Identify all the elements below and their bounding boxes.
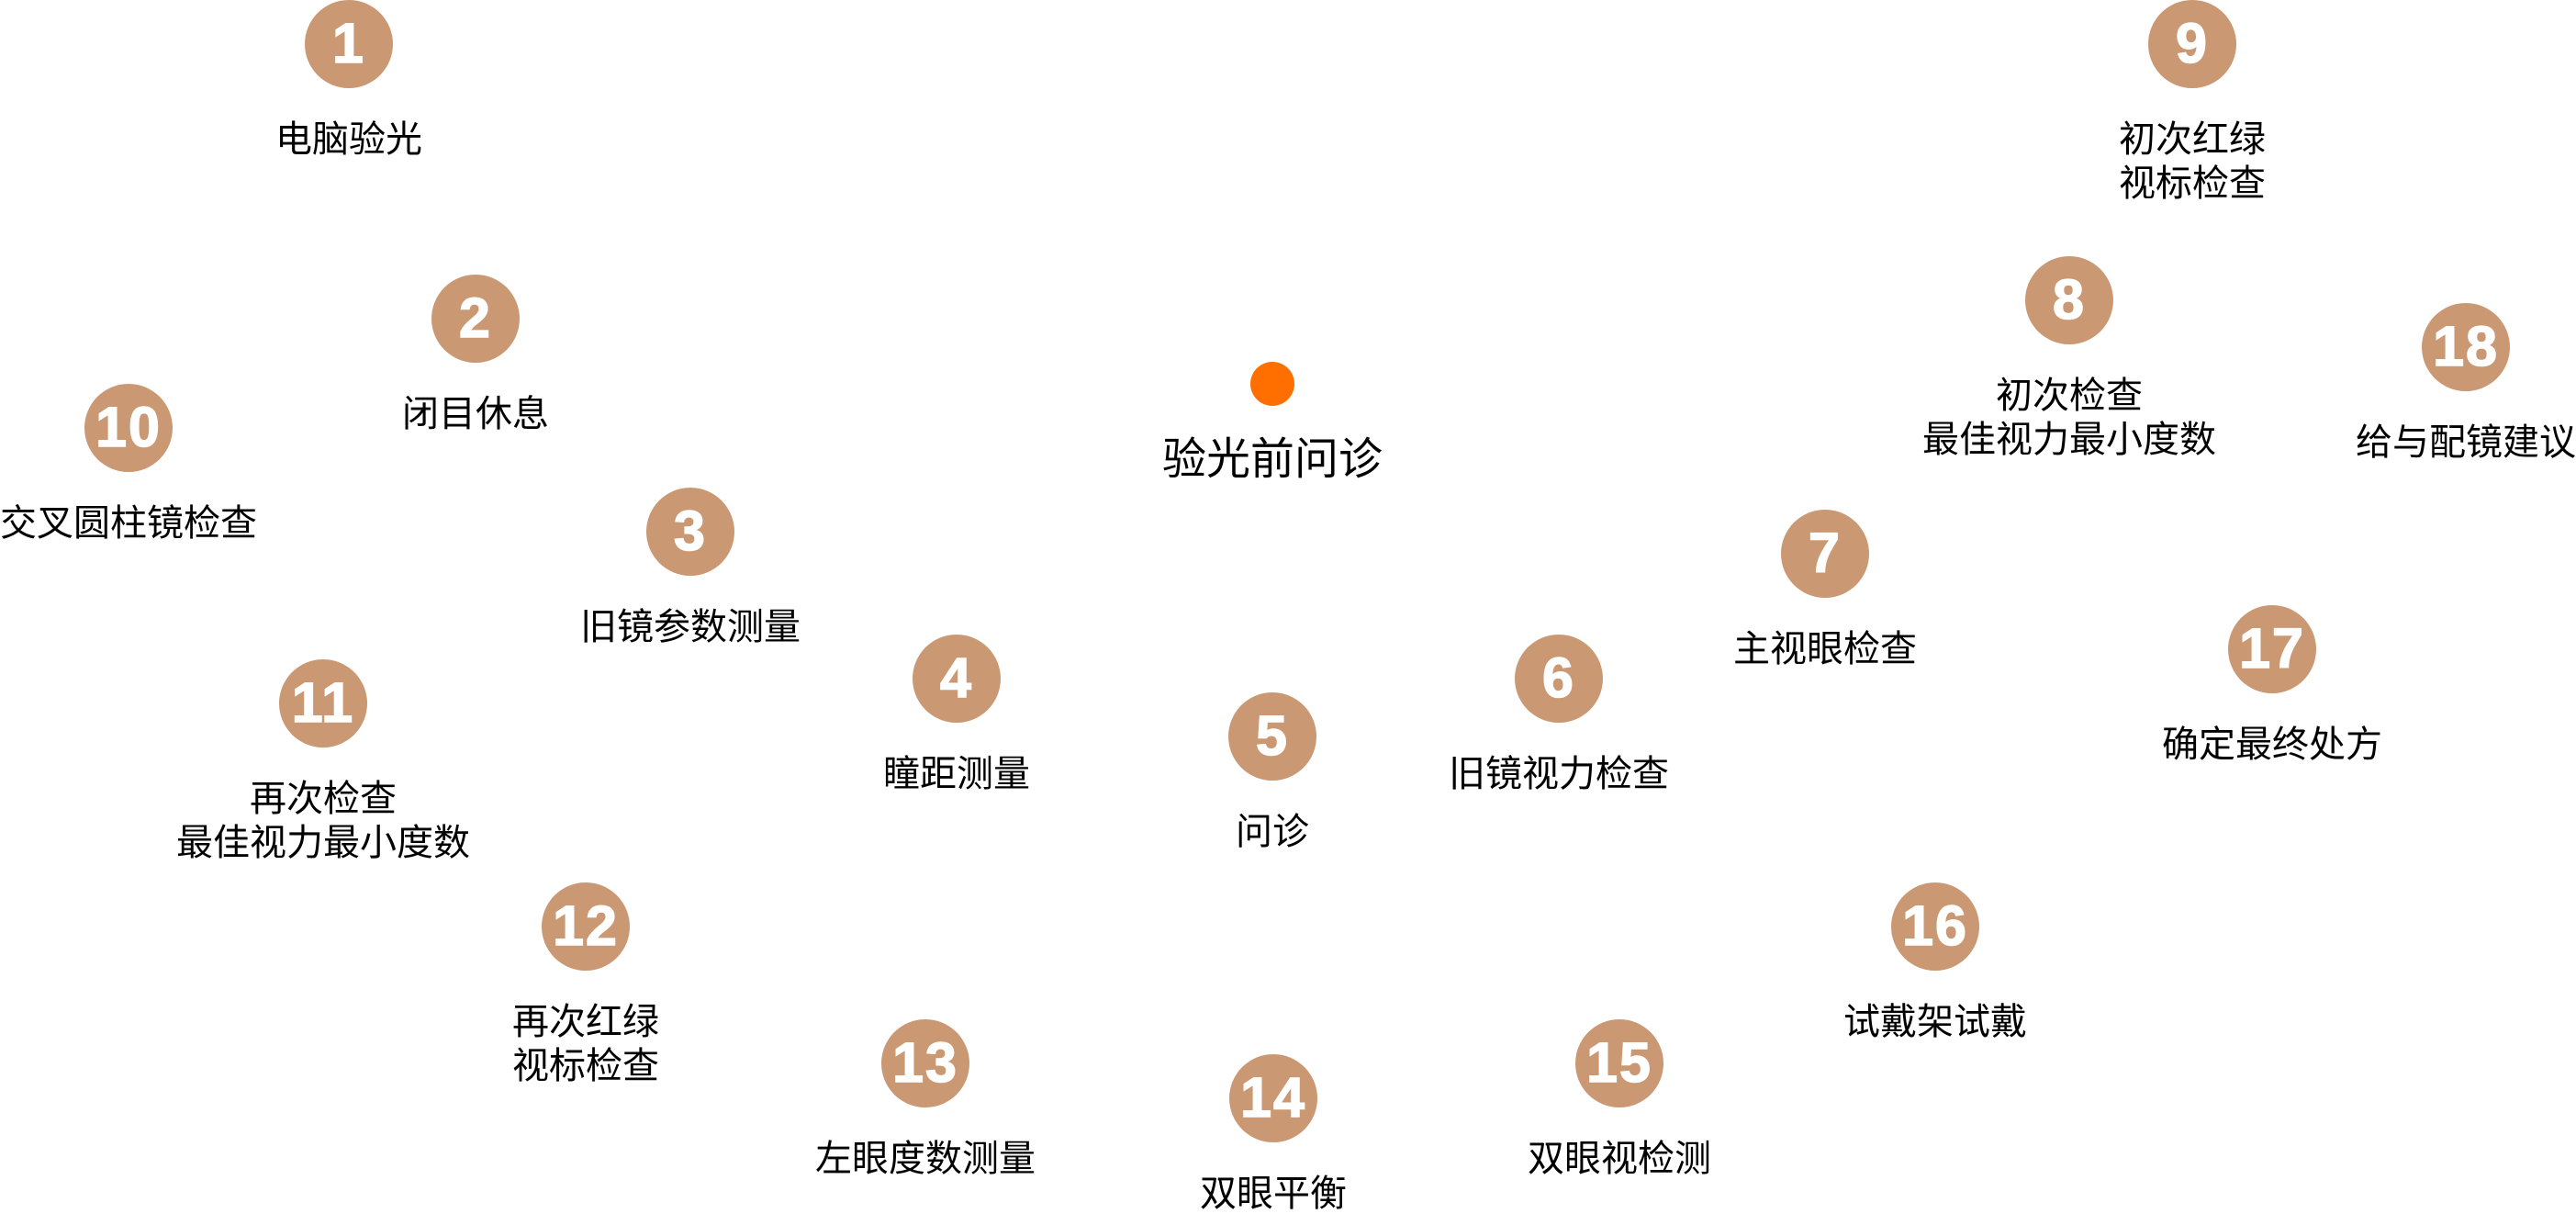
label 11: 再次检查 — [250, 779, 397, 819]
number badge 16 — [1891, 882, 1979, 971]
number badge 2 — [431, 275, 520, 363]
label 5: 问诊 — [1236, 812, 1309, 852]
label 15: 双眼视检测 — [1528, 1139, 1711, 1179]
step 9 — [2119, 0, 2266, 204]
number badge 1 — [305, 0, 393, 88]
step 14 — [1200, 1054, 1347, 1214]
step 11 — [176, 659, 470, 863]
number badge 8: 8 — [2053, 268, 2086, 331]
number badge 17 — [2228, 605, 2316, 693]
step 13 — [815, 1019, 1036, 1179]
number badge 4: 4 — [940, 646, 973, 709]
number badge 3 — [646, 488, 734, 576]
label 16: 试戴架试戴 — [1843, 1002, 2027, 1042]
label 9 — [2119, 119, 2266, 204]
step 4 — [883, 635, 1030, 794]
number badge 6: 6 — [1542, 646, 1575, 709]
step 7 — [1733, 510, 1917, 669]
label 2: 闭目休息 — [402, 394, 549, 434]
step 18 — [2356, 303, 2576, 463]
number badge 7: 7 — [1809, 522, 1842, 584]
label 9: 初次红绿 — [2119, 119, 2266, 160]
number badge 18 — [2422, 303, 2510, 391]
number badge 13: 13 — [892, 1031, 958, 1094]
number badge 10: 10 — [95, 396, 162, 458]
step 8 — [1922, 256, 2216, 460]
label 12: 视标检查 — [512, 1046, 659, 1086]
number badge 9 — [2148, 0, 2236, 88]
number badge 11: 11 — [292, 671, 354, 734]
number badge 11 — [279, 659, 367, 747]
label 6: 旧镜视力检查 — [1449, 754, 1669, 794]
label 8: 初次检查 — [1996, 376, 2143, 416]
step 15 — [1528, 1019, 1711, 1179]
step 6 — [1449, 635, 1669, 794]
step 10 — [0, 384, 257, 544]
number badge 14 — [1229, 1054, 1317, 1142]
label 1: 电脑验光 — [275, 119, 422, 160]
step 1 — [275, 0, 422, 160]
number badge 12 — [542, 882, 630, 971]
start dot and title: pre-exam consultation — [1162, 362, 1383, 484]
label 8: 最佳视力最小度数 — [1922, 420, 2216, 460]
number badge 5: 5 — [1256, 704, 1289, 767]
label 11 — [176, 779, 470, 863]
label 12: 再次红绿 — [512, 1002, 659, 1042]
icon: orange start dot — [1250, 362, 1294, 406]
label 10: 交叉圆柱镜检查 — [0, 503, 257, 544]
number badge 3: 3 — [674, 500, 707, 562]
step 16 — [1843, 882, 2027, 1042]
number badge 13 — [881, 1019, 969, 1107]
label 14: 双眼平衡 — [1200, 1174, 1347, 1214]
step 3 — [580, 488, 801, 647]
label 18: 给与配镜建议 — [2356, 422, 2576, 463]
label 12 — [512, 1002, 659, 1086]
step 2 — [402, 275, 549, 434]
number badge 8 — [2025, 256, 2113, 344]
number badge 12: 12 — [553, 894, 619, 957]
label 17: 确定最终处方 — [2162, 725, 2382, 765]
label 9: 视标检查 — [2119, 163, 2266, 204]
number badge 14: 14 — [1240, 1066, 1306, 1129]
step 12 — [512, 882, 659, 1086]
label 4: 瞳距测量 — [883, 754, 1030, 794]
number badge 7 — [1781, 510, 1869, 598]
label 11: 最佳视力最小度数 — [176, 823, 470, 863]
number badge 5 — [1228, 692, 1316, 781]
number badge 2: 2 — [459, 287, 492, 349]
label 13: 左眼度数测量 — [815, 1139, 1036, 1179]
number badge 15: 15 — [1586, 1031, 1652, 1094]
step 17 — [2162, 605, 2382, 765]
number badge 9: 9 — [2176, 12, 2209, 74]
number badge 10 — [84, 384, 173, 472]
number badge 6 — [1515, 635, 1603, 723]
label 8 — [1922, 376, 2216, 460]
number badge 1: 1 — [332, 12, 365, 74]
label 7: 主视眼检查 — [1733, 629, 1917, 669]
step 5 — [1228, 692, 1316, 852]
number badge 15 — [1575, 1019, 1663, 1107]
number badge 18: 18 — [2433, 315, 2499, 377]
number badge 4 — [913, 635, 1001, 723]
label 3: 旧镜参数测量 — [580, 607, 801, 647]
heading: pre-exam consultation: 验光前问诊 — [1162, 435, 1383, 484]
number badge 17: 17 — [2239, 617, 2305, 680]
number badge 16: 16 — [1902, 894, 1968, 957]
